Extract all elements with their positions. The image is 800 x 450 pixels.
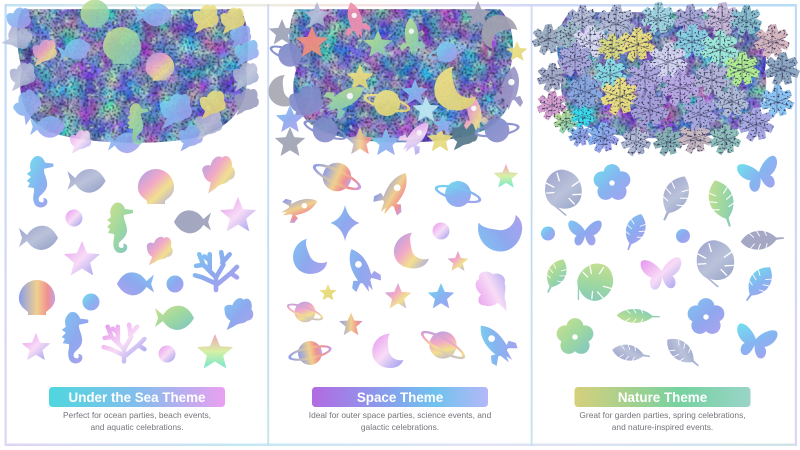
icon: fish [67,169,106,193]
icon: rainbow star [197,334,233,368]
description: under the sea: Perfect for ocean parties, beach events, [63,410,211,420]
description: space [309,410,492,432]
icon: pink star [220,197,256,231]
icon: planet lower [286,337,334,369]
sequin pile: space [266,0,529,159]
icon: bubble [158,346,176,362]
icon: blue planet [431,175,485,213]
description: nature: Great for garden parties, spring celebrations, [579,410,746,420]
icon: pale leaf [616,308,660,324]
description: nature [579,410,746,432]
icon: small rocket [278,189,322,226]
icon: shell lower [19,280,55,315]
icon: small shell [147,237,173,265]
icon: bubble [541,226,555,240]
icon: bubble [82,294,100,310]
icon: coral fragment [201,154,237,194]
icon: moon and rocket [473,206,526,256]
theme label: nature [574,387,750,407]
icon: striped planet [307,153,367,201]
description: space: Ideal for outer space parties, science events, and [309,410,492,420]
icon: rainbow leaf [737,261,779,307]
icon: green leaf [702,176,743,231]
theme label: space: Space Theme [357,390,443,405]
icon: small star [448,251,468,271]
theme label: space [312,387,488,407]
icon: blue flower [688,298,724,334]
icon: planet right [414,321,472,369]
icon: moon left [289,235,329,278]
icon: bubble [432,222,450,240]
icon: seahorse blue [27,156,53,208]
icon: leaf [618,210,651,254]
icon: star pink [385,283,411,308]
panel: space theme [266,0,529,432]
description: space: galactic celebrations. [361,422,439,432]
icon: butterfly blue [732,323,778,361]
icon: grey leaf [661,332,705,374]
icon: bubble [166,276,184,292]
icon: bubble [676,229,690,243]
icon: star teal [428,283,454,308]
icon: rainbow fish [155,306,194,330]
icon: butterfly aqua [736,155,783,195]
description: under the sea [63,410,211,432]
icon: butterfly lavender [568,221,602,245]
icon: rocket lavender [337,243,385,298]
sequin pile: sea [0,0,259,154]
sequin pile: nature [532,2,800,156]
icon: horizontal leaf [740,228,785,252]
theme label: under the sea [49,387,225,407]
icon: small grey leaf [611,341,651,365]
icon: rocket [369,165,419,221]
icon: rainbow star small [339,313,363,335]
icon: moon lower [372,334,403,368]
icon: shell [138,169,174,204]
icon: yellow star [319,284,337,300]
icon: butterfly pink [640,257,684,291]
icon: seahorse lower [62,312,88,364]
icon: blue fish [117,272,154,295]
icon: monstera [692,238,738,289]
icon: bubble [66,210,82,226]
icon: small purple star [22,333,50,360]
icon: nebula shape [469,267,518,314]
icon: star [64,241,100,275]
icon: coral fragment lower [224,298,253,330]
panel: under the sea theme [0,0,259,432]
icon: green leaf left [539,255,572,297]
icon: coral [195,252,237,290]
description: nature: and nature-inspired events. [612,422,713,432]
icon: star rainbow [494,164,518,188]
icon: large moon [392,231,430,270]
icon: seahorse green [107,203,133,253]
icon: purple coral [104,325,144,361]
icon: grey fish [174,210,211,233]
icon: flower [594,164,630,200]
theme label: nature: Nature Theme [618,390,707,405]
icon: four point star [331,205,359,241]
icon: fish left [19,226,58,250]
icon: monstera leaf [541,167,585,218]
icon: tall leaf [652,171,697,226]
icon: yellow green flower [557,318,593,354]
theme label: under the sea: Under the Sea Theme [69,390,205,405]
icon: yellow leaf [566,258,621,310]
description: under the sea: and aquatic celebrations. [90,422,184,432]
icon: planet small [283,296,327,328]
icon: rocket cloud [469,316,523,371]
panel: nature theme [532,2,800,432]
